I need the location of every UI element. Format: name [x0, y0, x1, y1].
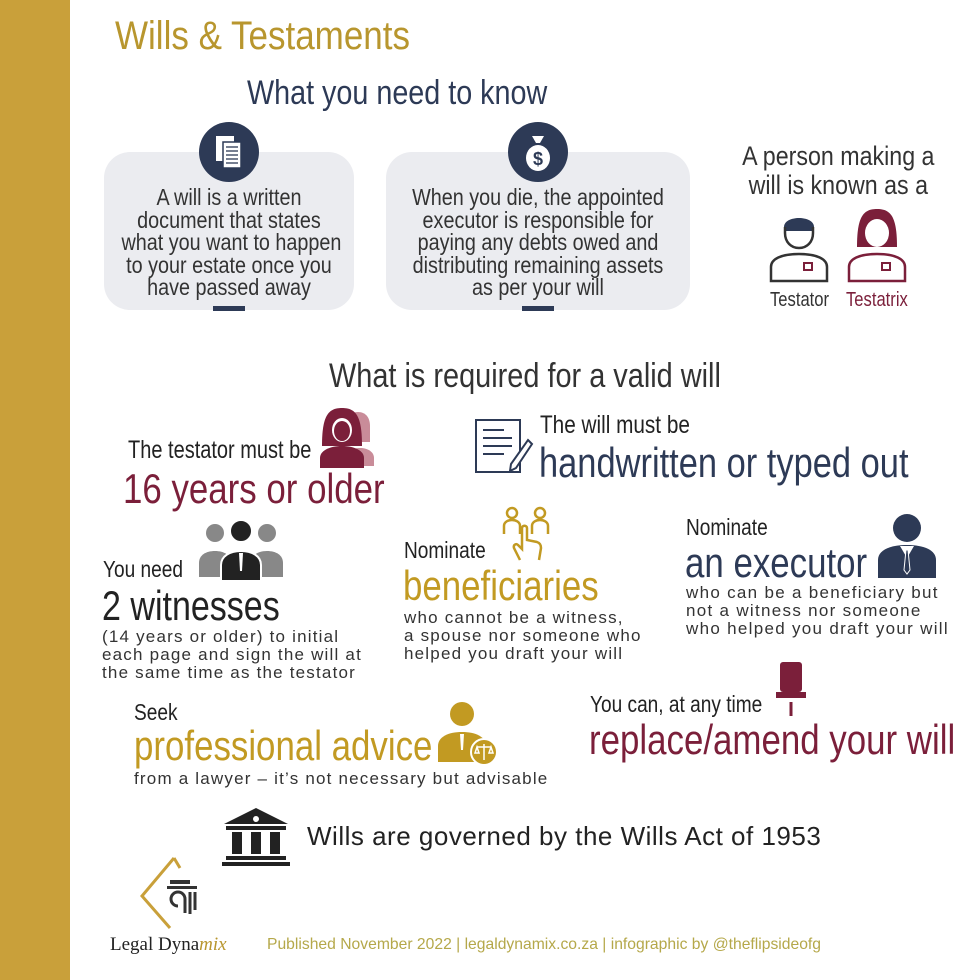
text: person making will: will is known as a — [749, 170, 928, 200]
block: witnesses — [102, 521, 362, 682]
text: nominate: Nominate — [686, 514, 768, 540]
gold side bar — [0, 0, 70, 980]
panel text: document that states — [137, 206, 321, 232]
panel text: as per your will — [472, 274, 604, 300]
icon: document pen — [475, 419, 534, 473]
text: you need: You need — [103, 556, 183, 582]
icon: testator — [770, 218, 828, 282]
panel text: what you want to happen — [122, 229, 341, 255]
icon: women — [320, 408, 374, 468]
text: will must be: The will must be — [540, 411, 690, 439]
icon: money bag: $ — [533, 149, 543, 169]
logo — [110, 857, 227, 955]
logo mark — [140, 857, 197, 929]
text: executor detail: not a witness nor someone — [686, 601, 922, 620]
label: testator: Testator — [770, 289, 829, 311]
text: witness detail: the same time as the testator — [102, 663, 356, 682]
text: executor detail: who helped you draft your will — [686, 619, 949, 638]
panel text — [122, 184, 341, 300]
block: handwritten — [475, 411, 909, 486]
panel text: to your estate once you — [126, 252, 332, 278]
text: handwritten: handwritten or typed out — [539, 439, 909, 486]
text: witness detail: (14 years or older) to initial — [102, 627, 339, 646]
text: beneficiaries detail — [404, 608, 642, 663]
label: testatrix: Testatrix — [846, 289, 908, 311]
icon: testatrix — [848, 209, 906, 282]
text: you can at any time: You can, at any time — [590, 691, 762, 717]
icon: hand pointing — [502, 506, 550, 560]
text: replace/amend: replace/amend your will — [589, 716, 955, 763]
logo text: Legal Dynamix — [110, 934, 227, 955]
heading: what you need to know: What you need to know — [247, 74, 547, 112]
icon: document — [199, 122, 259, 182]
text: wills act: Wills are governed by the Wills Act of 1953 — [307, 821, 821, 851]
text: professional advice: professional advice — [134, 722, 432, 769]
heading: valid will: What is required for a valid will — [329, 357, 721, 395]
text: person making will — [742, 141, 934, 200]
panel tab — [522, 306, 554, 311]
panel text: distributing remaining assets — [413, 252, 663, 278]
panel text: paying any debts owed and — [418, 229, 658, 255]
icon: money bag — [508, 122, 568, 182]
footer credit: Published November 2022 | legaldynamix.co.za | infographic by @theflipsideofg — [267, 936, 821, 953]
icon: courthouse — [222, 808, 290, 866]
text: seek: Seek — [134, 699, 178, 725]
text: witness detail: each page and sign the will at — [102, 645, 362, 664]
block: beneficiaries — [403, 506, 642, 663]
text: beneficiaries detail: helped you draft your will — [404, 644, 623, 663]
panel text: executor is responsible for — [423, 206, 653, 232]
title: Wills & Testaments — [115, 14, 410, 58]
text: 2 witnesses: 2 witnesses — [102, 582, 280, 629]
block: replace/amend — [589, 662, 955, 763]
icon: lawyer — [438, 702, 496, 764]
text: executor detail — [686, 583, 949, 638]
panel tab — [213, 306, 245, 311]
block: professional advice — [134, 699, 548, 788]
block: executor — [685, 514, 949, 638]
text: witness detail — [102, 627, 362, 682]
text: an executor: an executor — [685, 539, 867, 586]
text: lawyer detail: from a lawyer – it’s not necessary but advisable — [134, 769, 548, 788]
icon: stamp — [776, 662, 806, 716]
text: executor detail: who can be a beneficiary but — [686, 583, 939, 602]
panel text: have passed away — [147, 274, 311, 300]
text: 16 years: 16 years or older — [123, 465, 385, 512]
icon: executor — [878, 514, 936, 578]
text: nominate: Nominate — [404, 537, 486, 563]
panel text: When you die, the appointed — [412, 184, 664, 210]
text: testator must be: The testator must be — [128, 436, 311, 464]
panel text — [412, 184, 664, 300]
panel: will definition — [104, 152, 354, 310]
icon: witnesses — [199, 521, 283, 580]
text: beneficiaries detail: who cannot be a witness, — [404, 608, 624, 627]
text: beneficiaries: beneficiaries — [403, 562, 599, 609]
panel text: A will is a written — [156, 184, 302, 210]
text: beneficiaries detail: a spouse nor someone who — [404, 626, 642, 645]
text: person making will: A person making a — [742, 141, 934, 171]
block: age — [123, 408, 385, 512]
panel: executor — [386, 152, 690, 310]
